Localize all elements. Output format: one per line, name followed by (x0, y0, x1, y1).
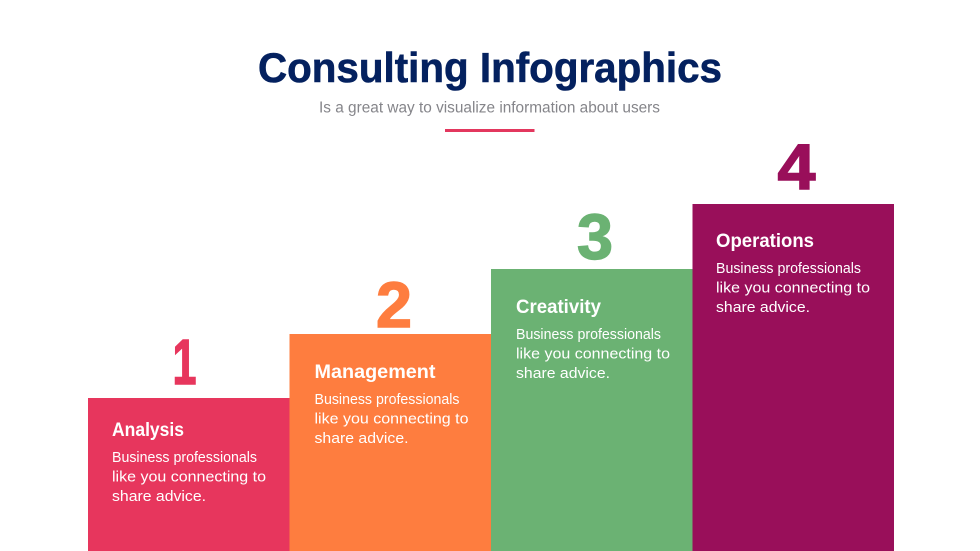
heading: Analysis: Analysis (112, 419, 184, 441)
accent underline (445, 129, 534, 132)
number 3: 3 (577, 201, 613, 273)
step 2: Management (290, 269, 491, 551)
bar 2 (290, 334, 491, 551)
description 2: like you connecting to (314, 412, 468, 428)
step 3: Creativity (491, 201, 692, 551)
bar 4 (692, 204, 894, 551)
heading: Management: Management (314, 361, 436, 383)
description 1: share advice. (112, 489, 206, 505)
step 1: Analysis (88, 326, 290, 551)
description 3: Business professionals (516, 327, 661, 343)
number 2: 2 (376, 269, 412, 341)
bar 1 (88, 398, 290, 551)
subtitle: Is a great way to visualize information about users (319, 100, 660, 116)
heading: Creativity: Creativity (516, 296, 601, 318)
bar 3 (491, 269, 692, 551)
step 4: Operations (692, 131, 894, 551)
description 2: share advice. (314, 431, 408, 447)
description 1: like you connecting to (112, 470, 266, 486)
number 4: 4 (778, 131, 816, 203)
number 1: 1 (172, 326, 196, 398)
title: Consulting Infographics (258, 44, 722, 91)
description 2: Business professionals (314, 392, 460, 408)
description 1: Business professionals (112, 450, 257, 466)
description 4: like you connecting to (716, 280, 870, 296)
description 4: share advice. (716, 300, 810, 316)
description 4: Business professionals (716, 261, 861, 277)
heading: Operations: Operations (716, 230, 814, 252)
description 3: like you connecting to (516, 346, 670, 362)
description 3: share advice. (516, 366, 610, 382)
